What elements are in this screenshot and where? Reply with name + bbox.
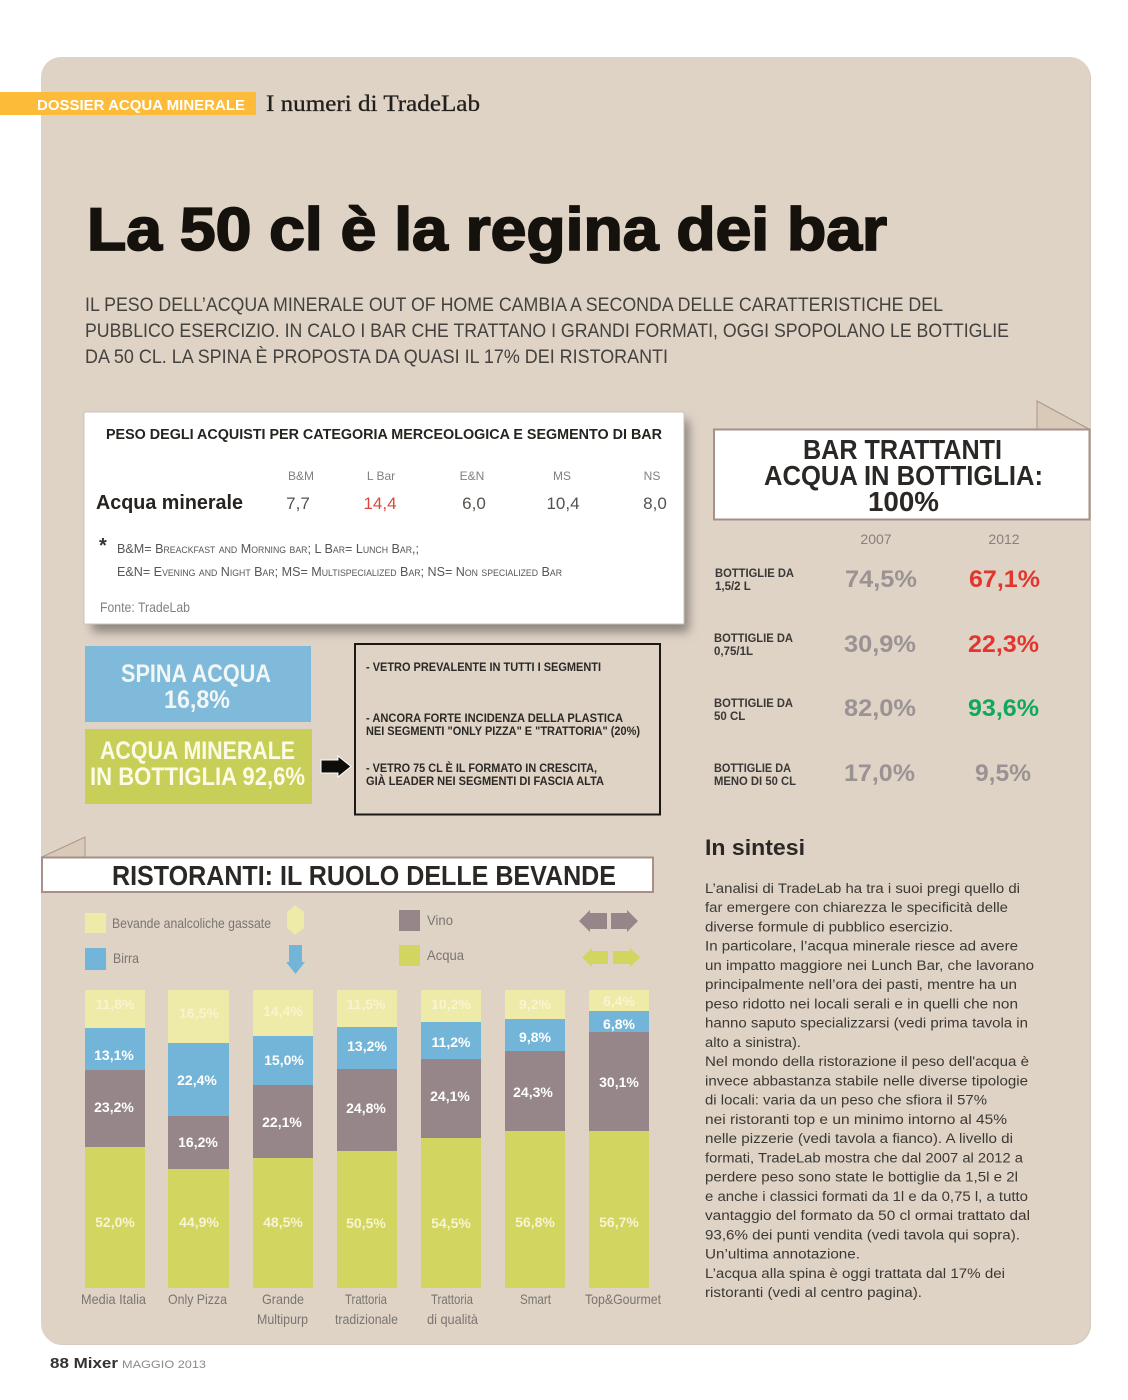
callout: spina acqua: 16,8%: [164, 686, 230, 714]
bar: Media Italia: 23,2%: [94, 1099, 134, 1115]
heading: bar trattanti: ACQUA IN BOTTIGLIA:: [764, 460, 1043, 491]
row: bottiglie 1,5/2 L: [715, 566, 1040, 593]
table column heads: MS: [553, 469, 571, 483]
chart category labels: Trattoria: [431, 1291, 473, 1307]
bar: Only Pizza: 16,2%: [178, 1134, 218, 1150]
table column heads: B&M: [288, 469, 314, 483]
title: La 50 cl è la regina dei bar: [87, 196, 887, 263]
row: bottiglie 0,75/1L: BOTTIGLIE DA: [714, 633, 793, 645]
intro text block: DA 50 CL. LA SPINA È PROPOSTA DA QUASI IL 17% DEI RISTORANTI: [85, 345, 668, 368]
callout: acqua in bottiglia: IN BOTTIGLIA 92,6%: [90, 763, 305, 791]
chart category labels: Multipurp: [257, 1311, 308, 1327]
heading: bar trattanti: 100%: [868, 486, 939, 517]
row: bottiglie 0,75/1L: 0,75/1L: [714, 646, 753, 658]
text block: in sintesi body: nei ristoranti top e un minimo intorno al 45%: [705, 1112, 1007, 1127]
bar: Grande Multipurp: 22,1%: [262, 1114, 302, 1130]
bar: Trattoria di qualità: [421, 990, 481, 1288]
callout: acqua in bottiglia: ACQUA MINERALE: [100, 737, 295, 765]
chart category labels: Media Italia: [81, 1291, 146, 1307]
bar: Trattoria tradizionale: 11,5%: [347, 996, 386, 1012]
panel: notes box: - VETRO 75 CL È IL FORMATO IN CRESCITA,: [366, 762, 597, 775]
bar: Top&Gourmet: 56,7%: [599, 1214, 639, 1230]
bar: Trattoria tradizionale: 13,2%: [347, 1038, 387, 1054]
legend item: vino: [399, 910, 638, 932]
table notes: B&M= Breackfast and Morning bar; L Bar= Lunch Bar,;: [117, 541, 419, 556]
bar: Grande Multipurp: 15,0%: [264, 1052, 304, 1068]
text block: in sintesi body: formati, TradeLab mostra che dal 2007 al 2012 a: [705, 1150, 1024, 1165]
footer: page number and issue: 88 Mixer: [50, 1355, 118, 1372]
text block: in sintesi body: 93,6% dei punti vendita (vedi tavola qui sopra).: [705, 1227, 1020, 1242]
table row: acqua minerale: 7,7: [286, 494, 310, 513]
section tag: dossier band: [0, 91, 480, 116]
bar: Grande Multipurp: [253, 990, 313, 1288]
intro text block: [85, 294, 1009, 368]
intro text block: IL PESO DELL’ACQUA MINERALE OUT OF HOME CAMBIA A SECONDA DELLE CARATTERISTICHE DEL: [85, 294, 943, 316]
bar: Smart: 9,8%: [519, 1029, 552, 1045]
bar: Trattoria di qualità: 11,2%: [432, 1034, 471, 1050]
row: bottiglie meno di 50 CL: BOTTIGLIE DA: [714, 763, 791, 775]
bar: Smart: 56,8%: [515, 1214, 555, 1230]
table row: acqua minerale: 10,4: [546, 494, 580, 513]
table notes: *: [99, 535, 107, 557]
heading: in sintesi: In sintesi: [705, 835, 805, 860]
section tag: dossier band: DOSSIER ACQUA MINERALE: [37, 97, 245, 114]
bar: Top&Gourmet: 30,1%: [599, 1074, 639, 1090]
bar: Trattoria di qualità: 24,1%: [430, 1088, 470, 1104]
chart category labels: Top&Gourmet: [585, 1291, 661, 1307]
legend item: acqua: [399, 945, 640, 967]
bar: Trattoria di qualità: 54,5%: [431, 1215, 471, 1231]
text block: in sintesi body: L’acqua alla spina è oggi trattata dal 17% dei: [705, 1266, 1005, 1281]
heading: ristoranti: RISTORANTI: IL RUOLO DELLE BEVANDE: [112, 860, 616, 891]
row: bottiglie 1,5/2 L: 67,1%: [969, 566, 1040, 593]
heading: bar trattanti: BAR TRATTANTI: [803, 434, 1002, 465]
row: bottiglie 50 CL: [714, 695, 1039, 723]
legend: [85, 905, 640, 974]
panel: notes box: GIÀ LEADER NEI SEGMENTI DI FASCIA ALTA: [366, 775, 604, 788]
text block: in sintesi body: principalmente nell’ora dei pasti, mentre ha un: [705, 977, 1017, 992]
callout: spina acqua: SPINA ACQUA: [121, 660, 271, 688]
footer: page number and issue: [50, 1355, 206, 1372]
text block: in sintesi body: [705, 881, 1034, 1300]
bar: Smart: [505, 990, 565, 1288]
text block: in sintesi body: Un’ultima annotazione.: [705, 1247, 860, 1262]
row: bottiglie meno di 50 CL: [714, 760, 1031, 788]
text block: in sintesi body: e anche i classici formati da 1l e da 0,75 l, a tutto: [705, 1189, 1028, 1204]
row: bottiglie 50 CL: BOTTIGLIE DA: [714, 698, 793, 710]
table column heads: L Bar: [367, 469, 395, 483]
row: bottiglie 50 CL: 93,6%: [968, 695, 1039, 722]
table: years: 2012: [988, 531, 1020, 547]
text block: in sintesi body: far emergere con chiarezza le specificità delle: [705, 900, 1008, 915]
legend item: bevande analcoliche gassate: [85, 905, 304, 935]
text block: in sintesi body: perdere peso sono state le bottiglie da 1,5l e 2l: [705, 1170, 1018, 1185]
text block: in sintesi body: peso ridotto nei locali serali e in quelli che non: [705, 996, 1018, 1011]
heading: bar trattanti: [714, 401, 1090, 520]
table heading: PESO DEGLI ACQUISTI PER CATEGORIA MERCEOLOGICA E SEGMENTO DI BAR: [106, 427, 663, 443]
icon: black arrow: [321, 756, 351, 777]
row: bottiglie 1,5/2 L: 1,5/2 L: [715, 581, 751, 593]
footer: page number and issue: MAGGIO 2013: [122, 1359, 206, 1371]
row: bottiglie 1,5/2 L: BOTTIGLIE DA: [715, 568, 794, 580]
table row: acqua minerale: [96, 492, 667, 514]
row: bottiglie 1,5/2 L: 74,5%: [845, 566, 917, 593]
legend item: birra: [85, 945, 305, 974]
callout: acqua in bottiglia: [85, 729, 312, 804]
section tag: dossier band: I numeri di TradeLab: [266, 91, 480, 116]
chart category labels: Only Pizza: [168, 1291, 227, 1307]
row: bottiglie 0,75/1L: 30,9%: [844, 631, 916, 658]
bar: Only Pizza: [168, 990, 229, 1288]
row: bottiglie 0,75/1L: [714, 631, 1039, 658]
table notes: [99, 535, 562, 579]
table notes: E&N= Evening and Night Bar; MS= Multispecialized Bar; NS= Non specialized Bar: [117, 564, 562, 579]
panel: notes box: - VETRO PREVALENTE IN TUTTI I SEGMENTI: [366, 662, 601, 674]
bar: Media Italia: 11,8%: [96, 996, 135, 1012]
table row: acqua minerale: 6,0: [462, 494, 486, 513]
legend item: birra: Birra: [113, 950, 139, 966]
text block: in sintesi body: hanno saputo specializzarsi (vedi prima tavola in: [705, 1016, 1028, 1031]
bar: Only Pizza: 22,4%: [177, 1072, 217, 1088]
row: bottiglie 50 CL: 82,0%: [844, 695, 916, 722]
bar: Top&Gourmet: 6,8%: [603, 1016, 636, 1032]
chart category labels: Smart: [520, 1291, 551, 1307]
bar: Only Pizza: 44,9%: [179, 1214, 219, 1230]
table row: acqua minerale: 14,4: [363, 494, 397, 513]
table column heads: [288, 469, 660, 483]
bar: Grande Multipurp: 48,5%: [263, 1214, 303, 1230]
panel: notes box: - ANCORA FORTE INCIDENZA DELLA PLASTICA: [366, 713, 623, 725]
chart category labels: [81, 1291, 661, 1327]
row: bottiglie meno di 50 CL: MENO DI 50 CL: [714, 776, 796, 788]
text block: in sintesi body: invece abbastanza stabile nelle diverse tipologie: [705, 1073, 1028, 1088]
bar: Media Italia: [85, 990, 145, 1288]
bar: Trattoria tradizionale: 24,8%: [346, 1100, 386, 1116]
table: years: 2007: [860, 531, 892, 547]
legend item: bevande analcoliche gassate: Bevande analcoliche gassate: [112, 915, 271, 931]
bar: Trattoria di qualità: 10,2%: [431, 996, 471, 1012]
row: bottiglie 0,75/1L: 22,3%: [968, 631, 1039, 658]
bar: Grande Multipurp: 14,4%: [263, 1003, 303, 1019]
text block: in sintesi body: Nel mondo della ristorazione il peso dell'acqua è: [705, 1054, 1029, 1069]
bar: Top&Gourmet: 6,4%: [603, 993, 636, 1009]
text block: in sintesi body: un impatto maggiore nei Lunch Bar, che lavorano: [705, 958, 1034, 973]
chart category labels: Grande: [262, 1291, 304, 1307]
text block: in sintesi body: di locali: varia da un peso che sfiora il 57%: [705, 1093, 987, 1108]
legend item: vino: Vino: [427, 912, 453, 928]
chart category labels: di qualità: [427, 1311, 478, 1327]
text block: in sintesi body: alto a sinistra).: [705, 1035, 801, 1050]
bar: Trattoria tradizionale: 50,5%: [346, 1215, 386, 1231]
table column heads: E&N: [460, 469, 484, 483]
text block: in sintesi body: diverse formule di pubblico esercizio.: [705, 920, 953, 934]
table source: Fonte: TradeLab: [100, 599, 190, 615]
panel: notes box: [355, 644, 660, 814]
text block: in sintesi body: In particolare, l’acqua minerale riesce ad avere: [705, 939, 1018, 954]
bar: Top&Gourmet: [589, 990, 649, 1288]
table: years: [860, 531, 1020, 547]
bar: Media Italia: 52,0%: [95, 1214, 135, 1230]
legend item: acqua: Acqua: [427, 947, 464, 963]
chart category labels: tradizionale: [335, 1311, 398, 1327]
row: bottiglie meno di 50 CL: 9,5%: [975, 760, 1031, 787]
bar: Media Italia: 13,1%: [94, 1047, 134, 1063]
intro text block: PUBBLICO ESERCIZIO. IN CALO I BAR CHE TRATTANO I GRANDI FORMATI, OGGI SPOPOLANO LE BOTTIGLIE: [85, 320, 1009, 342]
bar: Only Pizza: 16,5%: [179, 1005, 219, 1021]
callout: spina acqua: [85, 646, 311, 722]
stacked bar chart: [85, 990, 649, 1288]
panel: notes box: NEI SEGMENTI "ONLY PIZZA" E "TRATTORIA" (20%): [366, 726, 640, 738]
text block: in sintesi body: L’analisi di TradeLab ha tra i suoi pregi quello di: [705, 881, 1020, 896]
bar: Smart: 24,3%: [513, 1084, 553, 1100]
text block: in sintesi body: ristoranti (vedi al centro pagina).: [705, 1285, 922, 1300]
bar: Smart: 9,2%: [519, 996, 552, 1012]
row: bottiglie 50 CL: 50 CL: [714, 711, 745, 723]
panel: purchases table: [84, 412, 689, 632]
chart category labels: Trattoria: [345, 1291, 387, 1307]
heading: ristoranti: [42, 837, 653, 892]
table row: acqua minerale: Acqua minerale: [96, 492, 243, 514]
text block: in sintesi body: nelle pizzerie (vedi tavola a fianco). A livello di: [705, 1131, 1013, 1146]
table column heads: NS: [644, 469, 660, 483]
text block: in sintesi body: vantaggio del formato da 50 cl ormai trattato dal: [705, 1208, 1030, 1223]
row: bottiglie meno di 50 CL: 17,0%: [844, 760, 915, 787]
table row: acqua minerale: 8,0: [643, 494, 667, 513]
bar: Trattoria tradizionale: [337, 990, 397, 1288]
